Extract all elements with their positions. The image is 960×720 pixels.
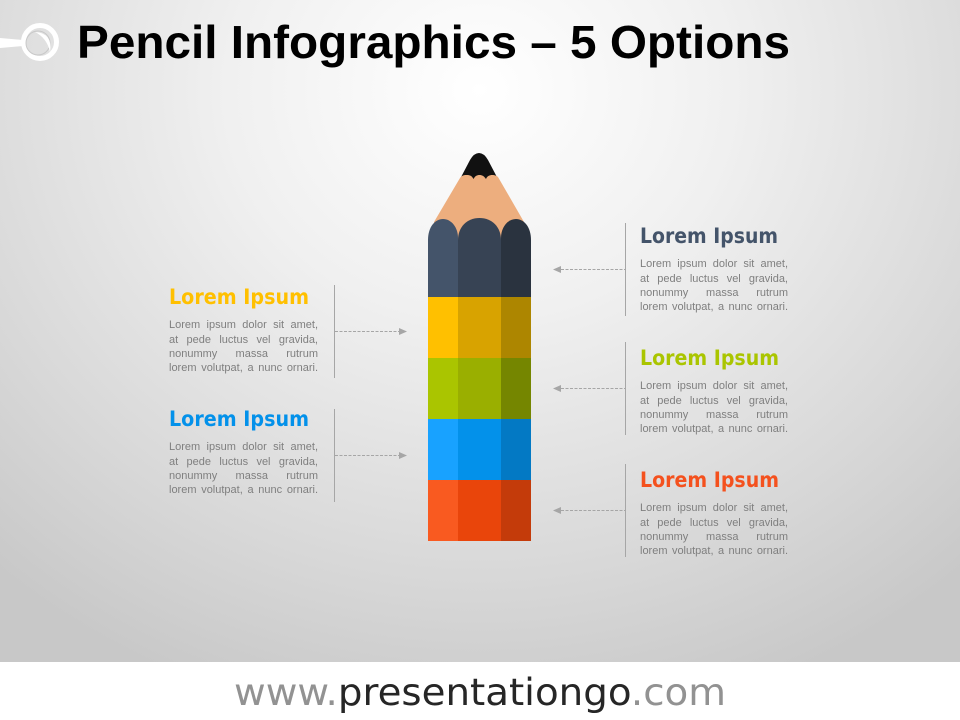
pencil lead (459, 153, 499, 181)
callout: green: Lorem Ipsum (640, 346, 779, 370)
callout: green: lorem volutpat, a nunc ornari. (640, 423, 788, 435)
pencil wood cone (434, 175, 524, 240)
callout: yellow: Lorem Ipsum (169, 285, 309, 309)
pencil barrel dark blue (428, 218, 531, 297)
callout: blue: Lorem Ipsum (169, 407, 309, 431)
callout: orange: Lorem Ipsum (640, 468, 779, 492)
callout: blue: lorem volutpat, a nunc ornari. (169, 484, 318, 496)
callout: dark blue: at pede luctus vel gravida, (640, 273, 788, 285)
pencil band green (428, 358, 531, 419)
callout: blue: at pede luctus vel gravida, (169, 456, 318, 468)
callout: yellow: nonummy massa rutrum (169, 348, 318, 360)
callout: yellow: lorem volutpat, a nunc ornari. (169, 362, 318, 374)
callout: orange (553, 464, 788, 561)
callout: dark blue: Lorem Ipsum (640, 224, 778, 248)
pencil band orange (428, 480, 531, 541)
callout: yellow (169, 285, 407, 378)
callout: orange: Lorem ipsum dolor sit amet, (640, 502, 788, 514)
title: Pencil Infographics – 5 Options (77, 16, 790, 68)
callout: dark blue: Lorem ipsum dolor sit amet, (640, 258, 788, 270)
footer url: www.presentationgo .com (234, 671, 726, 714)
callout: orange: at pede luctus vel gravida, (640, 517, 788, 529)
callout: dark blue: nonummy massa rutrum (640, 287, 788, 299)
callout: dark blue (553, 223, 788, 317)
callout: yellow: at pede luctus vel gravida, (169, 334, 318, 346)
callout: green: at pede luctus vel gravida, (640, 395, 788, 407)
callout: green: nonummy massa rutrum (640, 409, 788, 421)
callout: dark blue: lorem volutpat, a nunc ornari. (640, 301, 788, 313)
callout: blue: Lorem ipsum dolor sit amet, (169, 441, 318, 453)
pencil band yellow (428, 297, 531, 358)
pencil (428, 153, 531, 541)
callout: blue (169, 407, 407, 502)
callout: green: Lorem ipsum dolor sit amet, (640, 380, 788, 392)
callout: green (553, 342, 788, 439)
icon: magnifier logo (0, 26, 56, 58)
callout: orange: nonummy massa rutrum (640, 531, 788, 543)
callout: orange: lorem volutpat, a nunc ornari. (640, 545, 788, 557)
pencil band blue (428, 419, 531, 480)
callout: yellow: Lorem ipsum dolor sit amet, (169, 319, 318, 331)
callout: blue: nonummy massa rutrum (169, 470, 318, 482)
